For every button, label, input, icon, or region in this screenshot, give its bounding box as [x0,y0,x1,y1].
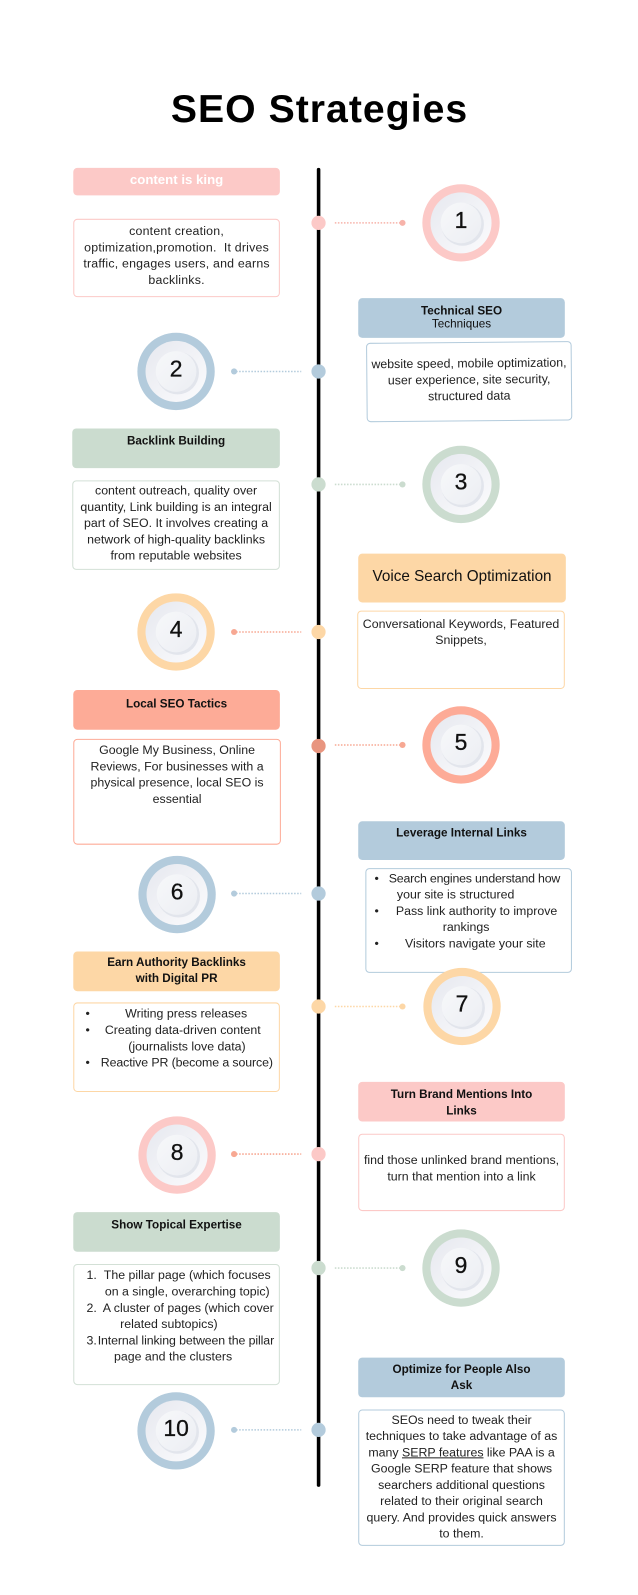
text block: step 9 numbered list: Internal linking between the pillar [98,1333,274,1347]
badge 1: 1 [455,207,467,233]
node 9 [311,1261,406,1275]
text block: step 6 bullet list: Pass link authority to improve [396,904,557,918]
node 3 [311,477,406,492]
badge 5 [422,706,500,784]
text block: step 2 description: website speed, mobile optimization, [371,355,567,371]
text block: step 3 description: quantity, Link building is an integral [80,500,272,514]
text block: step 7 bullet list: Reactive PR (become a source) [101,1055,273,1070]
text block: step 7 bullet list [73,1002,280,1092]
badge 4 [137,593,215,671]
text block: step 9 numbered list: 3. [87,1333,97,1347]
text block: step 10 description: SEOs need to tweak their [391,1413,532,1427]
heading: leverage internal links: Leverage Internal Links [396,827,527,840]
text block: step 6 bullet list: rankings [443,920,489,934]
badge 8 [138,1116,216,1194]
text block: step 6 bullet list: • [375,871,379,885]
badge 3 [422,446,500,523]
text block: step 7 bullet list: (journalists love data) [128,1039,246,1053]
text block: step 10 description [358,1410,565,1546]
badge 9 [422,1229,500,1307]
badge 7: 7 [456,991,468,1017]
panel: step 4 voice search optimization [357,554,566,689]
text block: step 8 description: find those unlinked brand mentions, [364,1153,559,1167]
node 6 [231,886,326,901]
heading: voice search optimization [358,554,566,602]
text block: step 6 bullet list: Visitors navigate your site [405,936,546,951]
text block: step 1 description: backlinks. [148,273,205,287]
text block: step 9 numbered list: 2. [87,1301,97,1315]
heading: leverage internal links [358,821,565,860]
text block: step 5 description: Reviews, For businesses with a [91,759,264,773]
text block: step 4 description [357,611,565,689]
text block: step 2 description: user experience, site security, [388,372,550,387]
text block: step 10 description: techniques to take advantage of as [366,1429,557,1443]
badge 5: 5 [455,729,467,755]
text block: step 7 bullet list: • [85,1055,90,1070]
text block: step 5 description: physical presence, local SEO is [91,775,264,790]
text block: step 3 description: content outreach, quality over [95,483,257,498]
badge 10 [137,1392,215,1470]
text block: step 10 description: searchers additional questions [378,1478,545,1492]
badge 2: 2 [170,356,182,382]
panel: step 9 topical expertise [73,1212,280,1386]
text block: step 1 description: content creation, [129,224,224,238]
text block: step 1 description: optimization,promotion. It drives [84,240,269,254]
text block: step 6 bullet list: your site is structured [397,887,514,902]
heading: backlink building: Backlink Building [127,436,225,448]
node 1 [311,216,406,230]
badge 3: 3 [455,469,467,495]
heading: backlink building [72,428,280,468]
panel: step 3 backlink building [72,428,280,570]
text block: step 10 description: related to their original search [380,1494,543,1508]
text block: step 10 description: many SERP features like PAA is a [368,1445,555,1459]
badge 4: 4 [170,616,183,642]
text block: step 9 numbered list: A cluster of pages (which cover [103,1301,274,1315]
text block: step 9 numbered list: The pillar page (which focuses [104,1268,271,1282]
heading: optimize for people also ask: Ask [451,1380,472,1392]
heading: technical SEO techniques: Techniques [432,319,491,331]
node 5 [311,739,406,753]
badge 7 [423,968,501,1045]
panel: step 10 people also ask [358,1358,565,1546]
text block: step 3 description: part of SEO. It involves creating a [84,516,268,530]
text block: step 10 description: to them. [439,1527,484,1541]
badge 6 [138,856,216,933]
text block: step 7 bullet list: Creating data-driven content [105,1023,261,1037]
panel: step 8 brand mentions [358,1082,565,1212]
panel: step 1 content is king [73,168,280,298]
heading: earn authority backlinks: with Digital PR [136,973,218,985]
text block: step 9 numbered list: on a single, overarching topic) [105,1284,270,1299]
panel: step 2 technical SEO [358,298,572,422]
timeline spine [317,168,320,1487]
heading: earn authority backlinks [73,952,280,991]
node 7 [311,999,406,1014]
heading: content is king: content is king [130,172,223,187]
heading: technical SEO techniques: Technical SEO [421,305,502,318]
badge 6: 6 [171,879,183,905]
text block: step 3 description: network of high-quality backlinks [87,532,265,547]
text block: step 8 description: turn that mention into a link [387,1169,536,1184]
node 2 [231,364,326,379]
heading: local SEO tactics: Local SEO Tactics [126,698,227,710]
node 10 [231,1423,326,1437]
title: SEO Strategies [171,88,468,131]
text block: step 10 description: Google SERP feature that shows [371,1461,552,1476]
text block: step 2 description: structured data [428,388,511,403]
badge 9: 9 [455,1252,467,1278]
heading: optimize for people also ask: Optimize for People Also [392,1364,531,1376]
text block: step 9 numbered list: related subtopics) [120,1317,218,1331]
heading: optimize for people also ask [358,1358,565,1397]
text block: step 9 numbered list: 1. [87,1268,97,1282]
text block: step 3 description: from reputable websites [110,549,242,563]
panel: step 6 leverage internal links [358,821,572,973]
panel: step 7 authority backlinks with digital PR [73,952,280,1092]
heading: turn brand mentions into links [358,1082,565,1122]
badge 10: 10 [163,1415,189,1441]
text block: step 8 description [358,1134,565,1211]
heading: turn brand mentions into links: Links [446,1105,477,1117]
badge 1 [422,184,500,262]
text block: step 3 description [72,480,280,570]
text block: step 2 description [366,341,572,422]
heading: local SEO tactics [73,690,280,730]
text block: step 7 bullet list: • [85,1023,90,1037]
text block: step 6 bullet list: • [375,936,379,951]
text block: step 10 description: query. And provides quick answers [367,1510,557,1525]
text block: step 5 description: essential [153,792,201,806]
heading: earn authority backlinks: Earn Authority Backlinks [107,957,246,969]
text block: step 5 description [73,739,281,845]
node 8 [231,1147,326,1161]
text block: step 1 description: traffic, engages users, and earns [83,256,270,271]
heading: show topical expertise [73,1212,280,1252]
text block: step 1 description [73,219,280,297]
text block: step 6 bullet list: Search engines understand how [389,871,560,885]
text block: step 7 bullet list: • [85,1007,90,1021]
text block: step 5 description: Google My Business, Online [99,743,255,757]
text block: step 6 bullet list [365,868,572,973]
text block: step 7 bullet list: Writing press releases [125,1007,247,1021]
text block: step 6 bullet list: • [375,904,379,918]
text block: step 4 description: Conversational Keywords, Featured [363,617,559,631]
node 4 [231,625,326,639]
heading: turn brand mentions into links: Turn Brand Mentions Into [391,1089,532,1101]
heading: show topical expertise: Show Topical Expertise [111,1219,242,1231]
text block: step 4 description: Snippets, [435,633,487,647]
text block: step 9 numbered list [73,1264,280,1385]
badge 8: 8 [171,1139,183,1165]
badge 2 [137,333,215,410]
heading: technical SEO techniques [358,298,565,338]
heading: content is king [73,168,280,195]
heading: voice search optimization: Voice Search Optimization [373,568,552,585]
text block: step 9 numbered list: page and the clusters [114,1349,232,1364]
panel: step 5 local SEO tactics [73,690,281,845]
